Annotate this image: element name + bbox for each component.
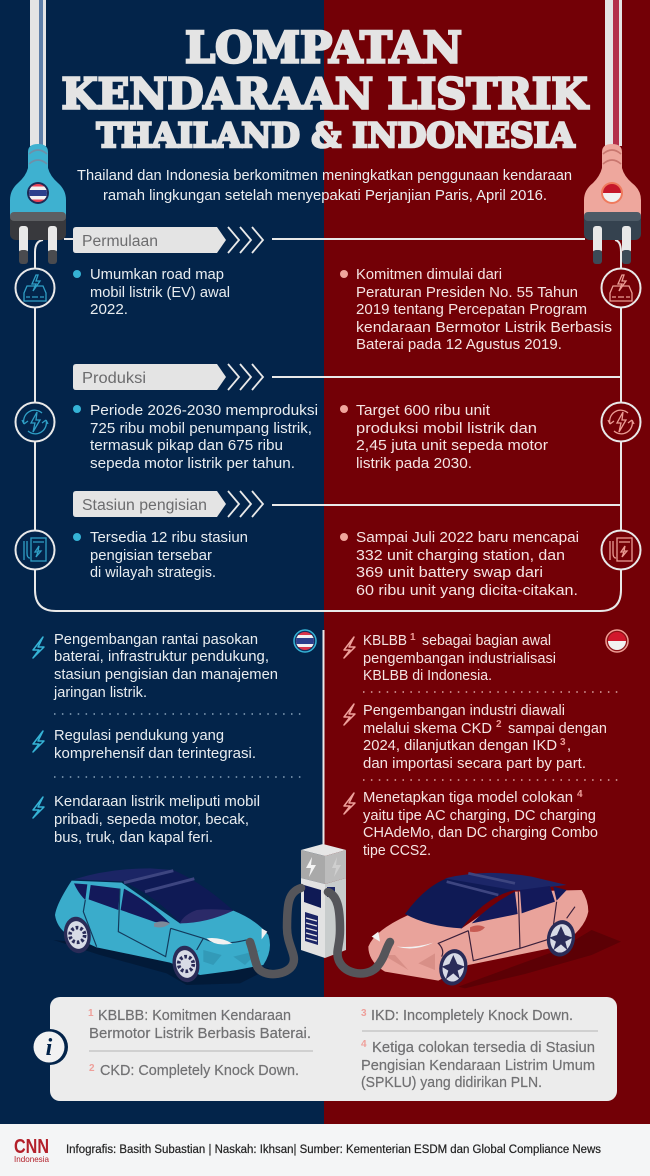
panel: footnotes: IKD: Incompletely Knock Down. bbox=[371, 1008, 573, 1024]
text: Thailand produksi: 725 ribu mobil penumpang listrik, bbox=[90, 421, 312, 437]
text: Thailand stasiun pengisian: di wilayah strategis. bbox=[90, 565, 216, 581]
icon: charging station Indonesia bbox=[602, 530, 640, 570]
text: Indonesia detail points: sampai dengan bbox=[508, 721, 607, 737]
icon: Thailand flag bbox=[294, 630, 316, 652]
text: Thailand produksi bbox=[73, 403, 318, 472]
text: Indonesia permulaan: Baterai pada 12 Agustus 2019. bbox=[356, 337, 562, 353]
icon: charging station Thailand bbox=[16, 530, 54, 570]
text: Thailand detail points: Pengembangan rantai pasokan bbox=[54, 632, 258, 648]
text: Indonesia detail points: 3 bbox=[560, 737, 566, 748]
panel: footnotes: KBLBB: Komitmen Kendaraan bbox=[98, 1008, 291, 1024]
icon: info: i bbox=[46, 1035, 53, 1061]
heading: Permulaan bbox=[64, 227, 585, 253]
text: Indonesia detail points: dan importasi secara part by part. bbox=[363, 756, 586, 772]
panel: footnotes: 2 bbox=[89, 1063, 95, 1074]
text: Indonesia detail points: KBLBB di Indonesia. bbox=[363, 668, 492, 684]
intro text: ramah lingkungan setelah menyepakati Perjanjian Paris, April 2016. bbox=[103, 188, 547, 204]
icon: Thailand plug bbox=[10, 0, 66, 264]
timeline frame connector bbox=[35, 240, 621, 611]
icon: Indonesia plug bbox=[584, 0, 641, 264]
illustration: charging station bbox=[301, 844, 346, 958]
text: Thailand stasiun pengisian: Tersedia 12 ribu stasiun bbox=[90, 530, 248, 546]
icon: electric car Thailand bbox=[16, 268, 54, 308]
text: Thailand detail points: jaringan listrik. bbox=[53, 685, 147, 701]
panel: footnotes: 1 bbox=[88, 1008, 94, 1019]
icons: Indonesia bolts bbox=[344, 637, 355, 814]
panel: footnotes: 4 bbox=[361, 1039, 367, 1050]
text: Indonesia permulaan bbox=[340, 267, 612, 353]
icon: info bbox=[32, 1029, 68, 1065]
heading: Stasiun pengisian: Stasiun pengisian bbox=[82, 497, 207, 514]
text: Indonesia permulaan: 2019 tentang Percepatan Program bbox=[356, 302, 587, 318]
panel: footnotes: Pengisian Kendaraan Listrim Umum bbox=[361, 1058, 595, 1074]
text: Indonesia detail points: melalui skema CKD bbox=[363, 721, 492, 737]
heading: Produksi bbox=[73, 364, 622, 390]
title: KENDARAAN LISTRIK bbox=[62, 70, 589, 118]
center divider bbox=[322, 630, 324, 846]
text: Thailand produksi: sepeda motor listrik per tahun. bbox=[90, 456, 295, 472]
panel: footnotes bbox=[50, 997, 617, 1101]
text: Indonesia detail points: Pengembangan industri diawali bbox=[363, 703, 565, 719]
logo: CNN Indonesia bbox=[14, 1136, 49, 1164]
text: Thailand detail points: Regulasi pendukung yang bbox=[54, 728, 224, 744]
text: Indonesia detail points: 2 bbox=[496, 719, 502, 730]
text: Thailand stasiun pengisian bbox=[73, 530, 248, 581]
text: Indonesia stasiun pengisian: Sampai Juli 2022 baru mencapai bbox=[356, 530, 579, 546]
text: Indonesia produksi: produksi mobil listrik dan bbox=[356, 421, 537, 437]
text: Thailand produksi: termasuk pikap dan 675 ribu bbox=[90, 438, 283, 454]
text: Thailand detail points: komprehensif dan terintegrasi. bbox=[54, 746, 256, 762]
heading: Stasiun pengisian bbox=[73, 491, 622, 517]
text: Indonesia stasiun pengisian: 369 unit battery swap dari bbox=[356, 565, 543, 581]
text: Thailand permulaan: mobil listrik (EV) awal bbox=[90, 285, 230, 301]
intro text bbox=[77, 168, 572, 204]
text: Thailand permulaan: Umumkan road map bbox=[90, 267, 224, 283]
illustration: charging cables bbox=[250, 888, 390, 974]
logo: CNN Indonesia: Indonesia bbox=[14, 1154, 49, 1164]
text: Indonesia permulaan: kendaraan Bermotor Listrik Berbasis bbox=[356, 320, 612, 336]
icons: Thailand bolts bbox=[33, 637, 44, 818]
text: Indonesia permulaan: Peraturan Presiden No. 55 Tahun bbox=[356, 285, 578, 301]
text: Indonesia detail points: 1 bbox=[410, 632, 416, 643]
text: Thailand detail points bbox=[53, 632, 301, 846]
text: Thailand detail points: bus, truk, dan kapal feri. bbox=[54, 830, 213, 846]
title bbox=[62, 24, 589, 156]
text: Thailand detail points: stasiun pengisian dan manajemen bbox=[54, 667, 278, 683]
text: Indonesia detail points: sebagai bagian awal bbox=[422, 633, 551, 649]
panel: footnotes: Bermotor Listrik Berbasis Baterai. bbox=[89, 1026, 311, 1042]
text: Indonesia detail points: KBLBB bbox=[363, 633, 407, 649]
heading: Produksi: Produksi bbox=[82, 370, 146, 387]
icon: recycle energy Thailand bbox=[16, 402, 54, 442]
text: Thailand detail points: pribadi, sepeda motor, becak, bbox=[54, 812, 249, 828]
text: Indonesia detail points bbox=[363, 632, 618, 859]
footer credits: Infografis: Basith Subastian | Naskah: Ikhsan| Sumber: Kementerian ESDM dan Global Compliance News bbox=[66, 1144, 601, 1156]
footer bar bbox=[0, 1124, 650, 1176]
text: Indonesia stasiun pengisian: 60 ribu unit yang dicita-citakan. bbox=[356, 583, 578, 599]
panel: footnotes: (SPKLU) yang didirikan PLN. bbox=[361, 1075, 542, 1091]
panel: Indonesia background bbox=[324, 0, 650, 1124]
icon: Indonesia flag bbox=[606, 630, 628, 652]
title: LOMPATAN bbox=[185, 24, 462, 74]
text: Thailand produksi: Periode 2026-2030 memproduksi bbox=[90, 403, 318, 419]
panel: footnotes: Ketiga colokan tersedia di Stasiun bbox=[372, 1040, 595, 1056]
text: Indonesia produksi: Target 600 ribu unit bbox=[356, 403, 490, 419]
text: Thailand detail points: Kendaraan listrik meliputi mobil bbox=[54, 794, 260, 810]
illustration: pink car bbox=[368, 873, 621, 988]
panel: footnotes: CKD: Completely Knock Down. bbox=[100, 1063, 299, 1079]
text: Indonesia produksi bbox=[340, 403, 548, 472]
text: Indonesia detail points: tipe CCS2. bbox=[363, 843, 431, 859]
text: Indonesia detail points: CHAdeMo, dan DC charging Combo bbox=[363, 825, 598, 841]
intro text: Thailand dan Indonesia berkomitmen meningkatkan penggunaan kendaraan bbox=[77, 168, 572, 184]
text: Indonesia detail points: 2024, dilanjutkan dengan IKD bbox=[363, 738, 557, 754]
text: Thailand stasiun pengisian: pengisian tersebar bbox=[90, 548, 212, 564]
logo: CNN Indonesia: CNN bbox=[14, 1136, 49, 1158]
text: Indonesia stasiun pengisian bbox=[340, 530, 579, 599]
text: Indonesia detail points: Menetapkan tiga model colokan bbox=[363, 790, 573, 806]
text: Thailand permulaan: 2022. bbox=[90, 302, 128, 318]
text: Indonesia produksi: listrik pada 2030. bbox=[356, 456, 472, 472]
panel: footnotes: 3 bbox=[361, 1008, 367, 1019]
title: THAILAND & INDONESIA bbox=[96, 116, 575, 156]
text: Thailand detail points: baterai, infrastruktur pendukung, bbox=[54, 649, 269, 665]
heading: Permulaan: Permulaan bbox=[82, 233, 158, 250]
text: Indonesia stasiun pengisian: 332 unit charging station, dan bbox=[356, 548, 565, 564]
text: Indonesia produksi: 2,45 juta unit sepeda motor bbox=[356, 438, 548, 454]
text: Indonesia detail points: 4 bbox=[577, 789, 583, 800]
icon: electric car Indonesia bbox=[602, 268, 640, 308]
text: Indonesia detail points: pengembangan industrialisasi bbox=[363, 651, 556, 667]
text: Thailand permulaan bbox=[73, 267, 230, 318]
icon: recycle energy Indonesia bbox=[602, 402, 640, 442]
illustration: blue car bbox=[53, 868, 270, 985]
text: Indonesia detail points: , bbox=[567, 738, 571, 754]
panel: Thailand background bbox=[0, 0, 324, 1124]
text: Indonesia permulaan: Komitmen dimulai dari bbox=[356, 267, 502, 283]
text: Indonesia detail points: yaitu tipe AC charging, DC charging bbox=[363, 808, 596, 824]
